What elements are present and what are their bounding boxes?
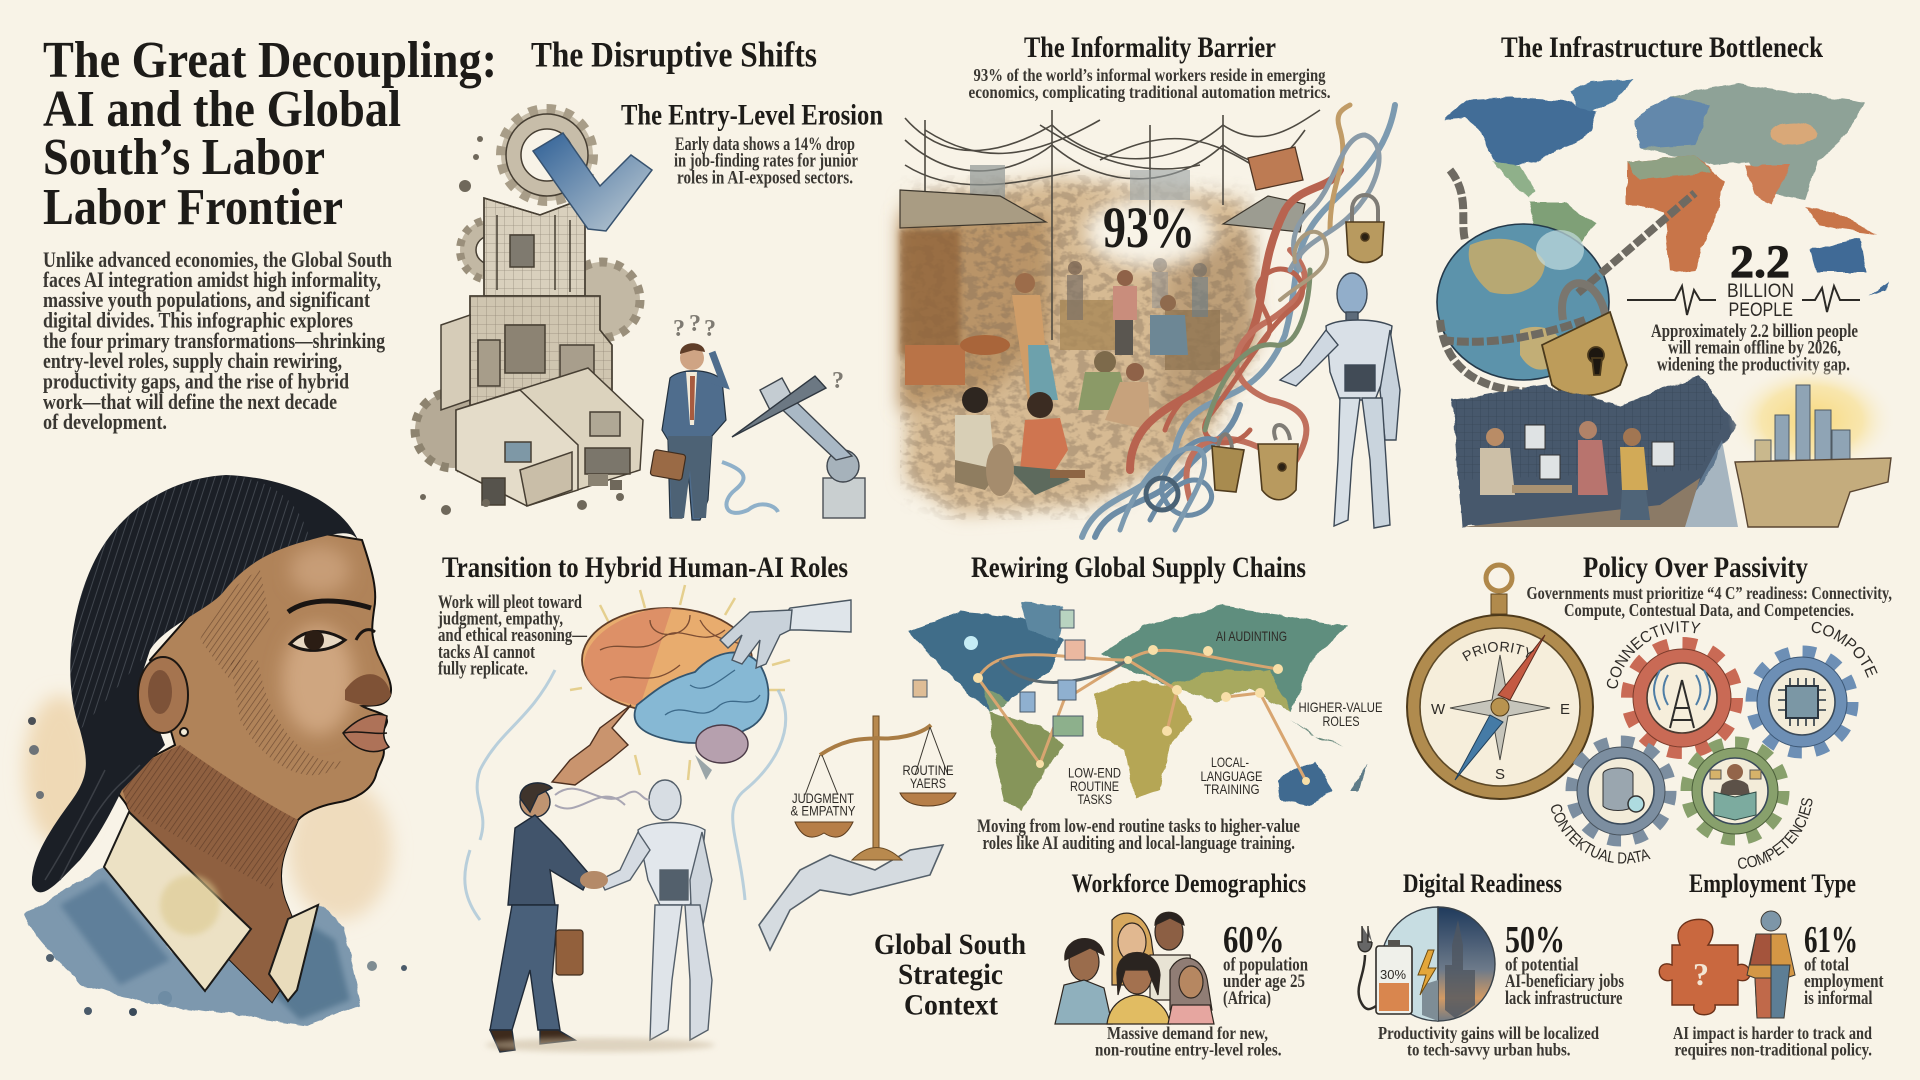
awnings: [900, 190, 1046, 228]
ear: [138, 657, 188, 733]
icon: compass: E: [1560, 701, 1570, 718]
heading: policy over passivity: Policy Over Passivity: [1583, 551, 1808, 584]
illustration: confused man with briefcase: [650, 343, 726, 520]
supply routes: [978, 650, 1306, 781]
heading: the entry-level erosion: The Entry-Level Erosion: [621, 98, 883, 132]
text: workforce demographics: Massive demand for new,: [1107, 1023, 1268, 1043]
text: hybrid roles: fully replicate.: [438, 658, 528, 680]
side gears: [415, 220, 640, 468]
text: hybrid roles: [437, 592, 588, 680]
intro paragraph: productivity gaps, and the rise of hybrid: [43, 368, 349, 394]
stat: employment type: [1804, 919, 1884, 1009]
heading: global south strategic context: Global South: [874, 928, 1026, 961]
gear arc labels: COMPOTE: [1812, 622, 1878, 678]
text: infrastructure bottleneck: widening the productivity gap.: [1657, 354, 1850, 376]
hair: [32, 475, 358, 892]
title: The Great Decoupling:: [43, 32, 497, 89]
text: employment type: requires non-traditional policy.: [1674, 1040, 1872, 1060]
stat: employment type: of total: [1804, 954, 1849, 976]
route nodes: [964, 636, 1310, 785]
text: policy: [1526, 583, 1892, 620]
map labels: TRAINING: [1204, 781, 1260, 797]
map labels: LANGUAGE: [1200, 768, 1262, 784]
icon: competencies gear: [1687, 743, 1783, 839]
intro paragraph: work—that will define the next decade: [43, 389, 337, 414]
stat: 2.2 billion people: BILLION: [1727, 281, 1794, 302]
shirt: [24, 867, 361, 1025]
text: infrastructure bottleneck: will remain offline by 2026,: [1668, 338, 1841, 358]
intro paragraph: of development.: [43, 409, 167, 434]
illustration: balance scale on robot hand: [759, 716, 956, 950]
intro paragraph: [43, 247, 392, 434]
title: [43, 32, 497, 236]
text: supply chains: [977, 816, 1300, 854]
stat: workforce demographics: [1223, 919, 1308, 1009]
gear arc labels: COMPETENCIES: [1738, 798, 1812, 869]
tower blocks: [441, 198, 612, 420]
icon: compass: W: [1431, 701, 1446, 718]
illustration: digital divide cliff: [1452, 364, 1896, 527]
text: entry-level erosion: in job-finding rates for junior: [674, 151, 858, 172]
text: hybrid roles: and ethical reasoning—: [438, 625, 588, 646]
stat: employment type: employment: [1804, 971, 1884, 992]
icon: compute gear: [1752, 652, 1852, 752]
icon: connectivity gear: [1628, 644, 1736, 752]
text: digital readiness: to tech-savvy urban hubs.: [1407, 1040, 1570, 1060]
stat: 93%: 93%: [1103, 195, 1195, 260]
text: entry-level erosion: roles in AI-exposed sectors.: [677, 168, 853, 188]
text: workforce demographics: [1095, 1023, 1282, 1060]
gear arc labels: CONTEKTUAL DATA: [1551, 804, 1651, 864]
illustration: crumbling office tower and gears: [415, 109, 643, 506]
illustration: chained globe: [1437, 170, 1695, 392]
title: Labor Frontier: [43, 179, 343, 236]
heading: transition to hybrid human-ai roles: Transition to Hybrid Human-AI Roles: [442, 551, 848, 584]
icon: compass: S: [1495, 766, 1505, 783]
stat: 2.2 billion people: [1627, 236, 1860, 321]
title: AI and the Global: [43, 81, 401, 138]
scale labels: JUDGMENT: [792, 790, 854, 806]
heading: global south strategic context: Strategic: [898, 958, 1003, 991]
nose and lips: [345, 674, 391, 705]
map labels: ROUTINE: [1070, 778, 1119, 794]
icon: puzzle piece: ?: [1693, 956, 1709, 992]
question marks: [673, 311, 844, 394]
heading: the infrastructure bottleneck: The Infrastructure Bottleneck: [1501, 31, 1823, 64]
intro paragraph: digital divides. This infographic explores: [43, 308, 353, 332]
route document icons: [913, 610, 1085, 736]
icon: contextual data gear: [1572, 742, 1670, 840]
map labels: TASKS: [1078, 791, 1112, 807]
text: infrastructure bottleneck: Approximately 2.2 billion people: [1651, 321, 1858, 342]
scale labels: YAERS: [910, 775, 946, 791]
question marks: ?: [689, 311, 701, 337]
stat: employment type: is informal: [1804, 988, 1872, 1009]
heading: global south strategic context: Context: [904, 988, 998, 1022]
stat: workforce demographics: of population: [1223, 954, 1308, 976]
icon: puzzle piece: [1659, 919, 1750, 1015]
stat: digital readiness: [1505, 919, 1624, 1009]
text: infrastructure bottleneck: [1651, 321, 1858, 376]
cubicle base: [456, 368, 643, 506]
icon: large padlock: [1542, 283, 1627, 396]
title: South’s Labor: [43, 129, 325, 186]
illustration: world map offline: [1444, 79, 1890, 295]
map labels: [1068, 628, 1382, 807]
text: informality barrier: [968, 65, 1330, 102]
map labels: AI AUDINTING: [1216, 628, 1287, 644]
illustration: brain: [570, 585, 790, 780]
text: entry-level erosion: Early data shows a 14% drop: [675, 134, 855, 155]
illustration: tangled chains and padlocks: [1082, 105, 1395, 537]
illustration: battery, plug and city: [1358, 907, 1495, 1021]
text: entry-level erosion: [674, 134, 858, 188]
icon: patchwork figure: [1747, 911, 1795, 1018]
text: informality barrier: economics, complicating traditional automation metrics.: [968, 82, 1330, 102]
top gear: [501, 109, 593, 201]
illustration: robot arm with pen: [732, 376, 865, 518]
stat: workforce demographics: 60%: [1223, 919, 1284, 961]
stat: 2.2 billion people: 2.2: [1730, 236, 1790, 288]
question marks: ?: [673, 316, 685, 342]
stat: digital readiness: AI-beneficiary jobs: [1505, 971, 1624, 992]
rubble: [420, 136, 624, 515]
heading: workforce demographics: Workforce Demographics: [1072, 869, 1306, 898]
scale labels: & EMPATNY: [790, 802, 856, 818]
illustration: robot in market: [1280, 273, 1400, 528]
heading: global south strategic context: [874, 928, 1026, 1022]
heading: digital readiness: Digital Readiness: [1403, 869, 1562, 898]
map labels: LOW-END: [1068, 764, 1121, 780]
text: workforce demographics: non-routine entry-level roles.: [1095, 1040, 1282, 1060]
illustration: man and robot handshake: [485, 780, 715, 1052]
skin: [115, 530, 391, 1002]
intro paragraph: Unlike advanced economies, the Global South: [43, 247, 392, 272]
icon: compass: [1406, 562, 1594, 800]
background buildings: [970, 165, 1005, 205]
heading: rewiring global supply chains: Rewiring Global Supply Chains: [971, 551, 1306, 584]
stat: digital readiness: lack infrastructure: [1505, 988, 1622, 1009]
icon: downward check arrow: [533, 133, 652, 231]
scale labels: ROUTINE: [902, 762, 954, 778]
illustration: robot hand touching brain: [720, 600, 851, 668]
text: supply chains: Moving from low-end routine tasks to higher-value: [977, 816, 1300, 837]
paint splatter: [28, 717, 36, 725]
heading: employment type: Employment Type: [1689, 869, 1856, 898]
energy swirls: [465, 670, 786, 920]
question marks: ?: [832, 368, 844, 394]
stat: workforce demographics: under age 25: [1223, 971, 1305, 992]
text: hybrid roles: Work will pleot toward: [438, 592, 582, 613]
scale labels: [790, 762, 954, 818]
illustration: battery, plug and city: 30%: [1380, 967, 1406, 982]
eye and brow: [288, 601, 371, 612]
illustration: woman portrait: [24, 475, 407, 1025]
collar: [104, 812, 251, 991]
illustration: informal market: [900, 110, 1320, 520]
illustration: human hand touching brain: [552, 705, 631, 785]
ink scribble: [722, 462, 778, 513]
crate: [1248, 147, 1303, 190]
intro paragraph: faces AI integration amidst high informality,: [43, 267, 381, 292]
stat: employment type: 61%: [1804, 919, 1858, 961]
icon: compass: PRIORITY: [1462, 642, 1534, 662]
stalls: [900, 230, 960, 355]
gear arc labels: CONNECTIVITY: [1606, 621, 1701, 688]
map labels: ROLES: [1322, 713, 1360, 729]
map labels: HIGHER-VALUE: [1298, 699, 1382, 715]
text: employment type: AI impact is harder to track and: [1673, 1023, 1872, 1043]
text: digital readiness: [1378, 1023, 1599, 1060]
text: employment type: [1673, 1023, 1872, 1060]
text: hybrid roles: judgment, empathy,: [437, 608, 563, 630]
market workers: [955, 258, 1208, 496]
heading: the informality barrier: The Informality Barrier: [1024, 31, 1276, 64]
heading: the disruptive shifts: The Disruptive Shifts: [531, 34, 817, 74]
intro paragraph: the four primary transformations—shrinking: [43, 328, 385, 353]
stat: workforce demographics: (Africa): [1223, 988, 1271, 1009]
text: informality barrier: 93% of the world’s informal workers reside in emerging: [974, 65, 1326, 85]
icon: padlocks: [1212, 195, 1384, 500]
illustration: supply chain map: [908, 603, 1368, 812]
text: hybrid roles: tacks AI cannot: [438, 642, 536, 663]
stat: digital readiness: of potential: [1505, 954, 1578, 976]
intro paragraph: massive youth populations, and significant: [43, 287, 371, 312]
text: policy: Compute, Contestual Data, and Competencies.: [1564, 600, 1854, 620]
question marks: ?: [704, 316, 716, 342]
stat: digital readiness: 50%: [1505, 919, 1565, 961]
illustration: young people group: [1055, 912, 1214, 1024]
stat: 2.2 billion people: PEOPLE: [1728, 300, 1793, 321]
gear arc labels: [1551, 621, 1878, 869]
intro paragraph: entry-level roles, supply chain rewiring,: [43, 348, 342, 373]
text: digital readiness: Productivity gains will be localized: [1378, 1023, 1599, 1043]
map labels: LOCAL-: [1211, 754, 1249, 770]
wires and poles: [905, 110, 1320, 340]
text: supply chains: roles like AI auditing and local-language training.: [982, 833, 1295, 854]
